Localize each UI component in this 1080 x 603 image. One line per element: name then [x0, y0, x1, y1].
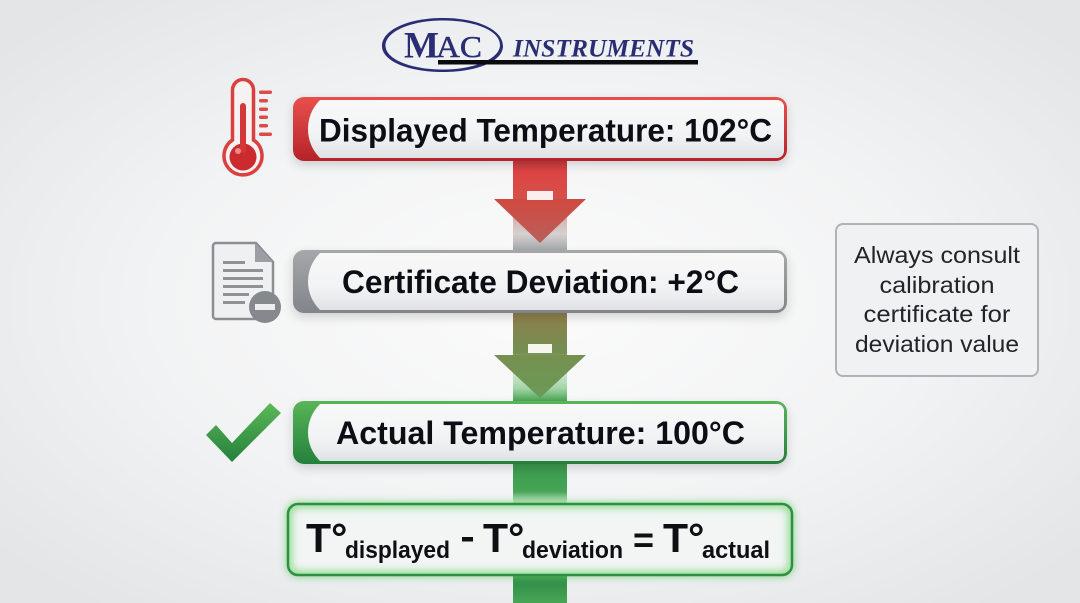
formula text: deviation	[522, 537, 623, 564]
formula text: T°	[306, 515, 347, 561]
icon: document with minus	[213, 243, 281, 323]
label: displayed temperature: Displayed Temperature: 102°C	[319, 112, 772, 148]
callout: consult calibration certificate: Always consult	[854, 242, 1020, 268]
card: displayed temperature	[293, 97, 787, 161]
formula text: T°	[663, 515, 704, 561]
arrow: deviation to actual	[494, 313, 586, 401]
connector: below formula	[513, 576, 567, 603]
callout: consult calibration certificate: certificate for	[864, 301, 1011, 327]
logo: MAC Instruments: INSTRUMENTS	[512, 36, 694, 62]
callout: consult calibration certificate	[836, 224, 1038, 376]
formula text	[306, 515, 770, 564]
logo: MAC Instruments: AC	[436, 29, 482, 64]
card: actual temperature	[293, 401, 787, 464]
arrow: displayed to deviation	[494, 161, 586, 250]
connector: actual to formula	[513, 464, 567, 503]
icon: green check mark	[206, 403, 281, 462]
callout: consult calibration certificate: deviation value	[855, 331, 1019, 357]
formula text: displayed	[345, 537, 450, 564]
icon: thermometer	[224, 80, 272, 175]
card: certificate deviation	[293, 250, 787, 313]
label: actual temperature: Actual Temperature: 100°C	[336, 415, 745, 451]
label: certificate deviation: Certificate Deviation: +2°C	[342, 264, 739, 300]
formula text: =	[633, 519, 654, 560]
logo: MAC Instruments	[382, 18, 698, 72]
logo: MAC Instruments: M	[404, 26, 439, 66]
formula text: actual	[702, 537, 770, 564]
formula text: T°	[483, 515, 524, 561]
callout: consult calibration certificate: calibration	[880, 272, 994, 298]
formula box	[286, 502, 794, 577]
